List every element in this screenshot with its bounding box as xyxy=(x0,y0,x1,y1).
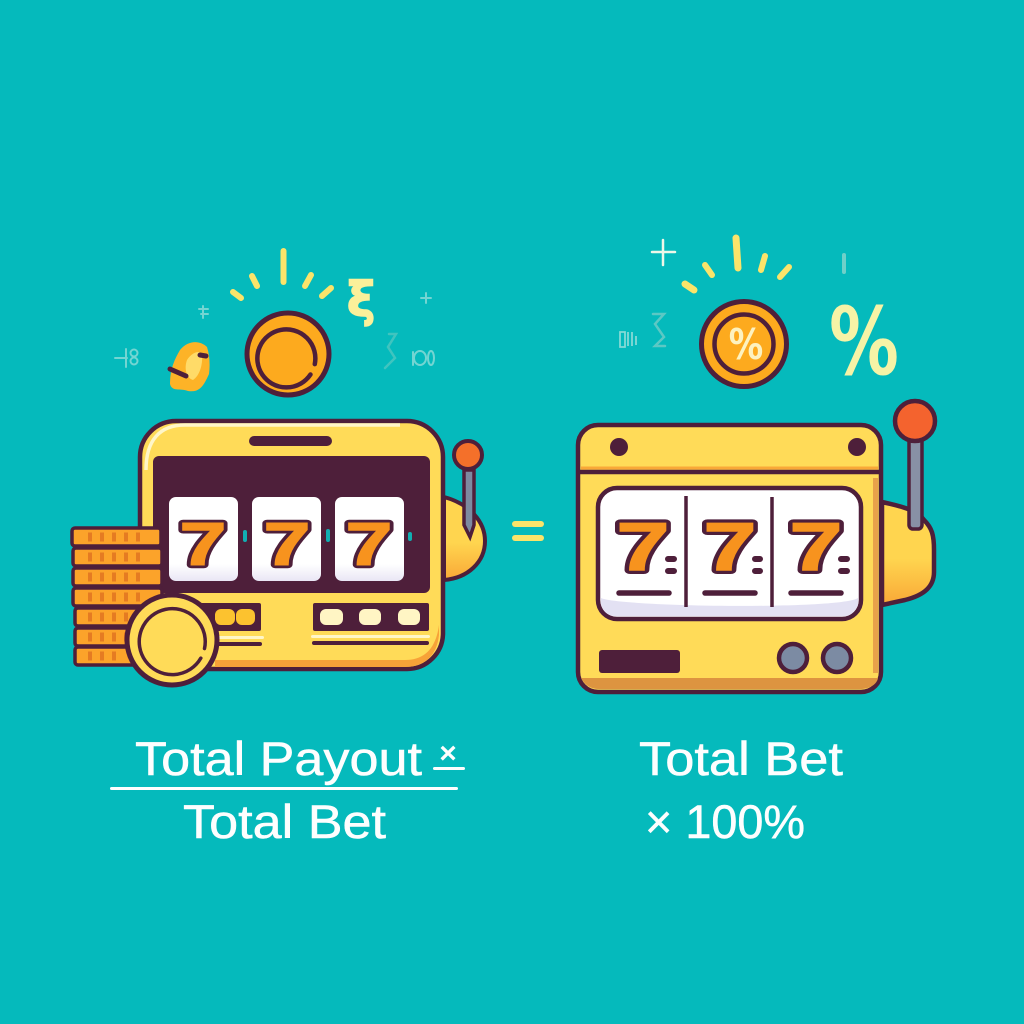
left reel 3: 7 xyxy=(346,511,392,578)
percent coin xyxy=(702,302,786,386)
right reel 3: 7 xyxy=(790,508,842,585)
equals sign xyxy=(512,521,544,541)
multiply sign with underline xyxy=(433,737,465,770)
left machine top highlight xyxy=(146,425,400,470)
multiply sign with underline: × xyxy=(439,737,457,770)
faint sparkle marks left xyxy=(115,306,208,367)
left reel 1: 7 xyxy=(180,511,226,578)
left reel 3: 7 xyxy=(346,511,392,578)
faint dash xyxy=(842,253,846,274)
gold bell nugget xyxy=(170,342,210,391)
top slot pill xyxy=(249,436,332,446)
sparkle group above right machine xyxy=(620,238,899,397)
total bet text: Total Bet xyxy=(639,732,843,785)
left slot machine illustration xyxy=(72,421,485,685)
reel dividers xyxy=(686,496,772,607)
fraction bar xyxy=(110,787,458,790)
yellow squiggle symbol: ξ xyxy=(347,272,375,328)
sparkle group above left machine xyxy=(115,251,434,395)
large front coin xyxy=(127,595,217,685)
right machine cabinet xyxy=(578,425,881,692)
faint tiny marks xyxy=(620,332,636,347)
left reel 3 xyxy=(335,497,404,581)
sparkle cross xyxy=(652,240,675,265)
header divider xyxy=(578,470,881,474)
large percent sign: % xyxy=(829,288,899,397)
side bump of right machine xyxy=(882,502,934,605)
left sun rays xyxy=(233,251,331,298)
right reel 3: 7 xyxy=(790,508,842,585)
screw right xyxy=(848,438,866,456)
round button left xyxy=(779,644,807,672)
percent coin: % xyxy=(729,321,763,370)
right slot machine illustration xyxy=(578,401,935,692)
left coin xyxy=(247,313,329,395)
header shadow xyxy=(581,466,878,470)
right formula xyxy=(639,732,843,848)
left reel 2 xyxy=(252,497,321,581)
cabinet bottom shade xyxy=(581,678,878,689)
numerator text: Total Payout xyxy=(135,732,422,785)
left reel 1 xyxy=(169,497,238,581)
denominator text: Total Bet xyxy=(183,795,386,848)
cabinet right shade xyxy=(873,478,878,673)
faint sparkle marks right xyxy=(385,293,434,368)
coin stack xyxy=(72,528,162,665)
left reel 2: 7 xyxy=(264,511,310,578)
round button right xyxy=(823,644,851,672)
right machine lever xyxy=(895,401,935,529)
right sun rays xyxy=(685,238,789,290)
dark label plate xyxy=(599,650,680,673)
right button panel xyxy=(311,603,430,645)
left button panel xyxy=(190,603,264,646)
left reel 2: 7 xyxy=(264,511,310,578)
side bump of left machine xyxy=(444,497,485,580)
reel window lower shade xyxy=(601,598,858,616)
faint squiggle xyxy=(653,314,665,346)
right reel 1: 7 xyxy=(617,508,669,585)
reel separator marks xyxy=(243,529,412,542)
left formula xyxy=(110,732,465,848)
screw left xyxy=(610,438,628,456)
right reel 2: 7 xyxy=(704,508,756,585)
left machine dark screen xyxy=(153,456,430,593)
left machine bottom shade xyxy=(215,625,439,667)
reel window xyxy=(598,488,861,619)
right reel 2: 7 xyxy=(704,508,756,585)
left machine cabinet xyxy=(140,421,443,669)
left machine lever xyxy=(454,441,482,537)
right reel 1: 7 xyxy=(617,508,669,585)
left reel 1: 7 xyxy=(180,511,226,578)
coin stack edge engravings xyxy=(88,537,148,656)
times 100 percent text: × 100% xyxy=(645,795,805,848)
